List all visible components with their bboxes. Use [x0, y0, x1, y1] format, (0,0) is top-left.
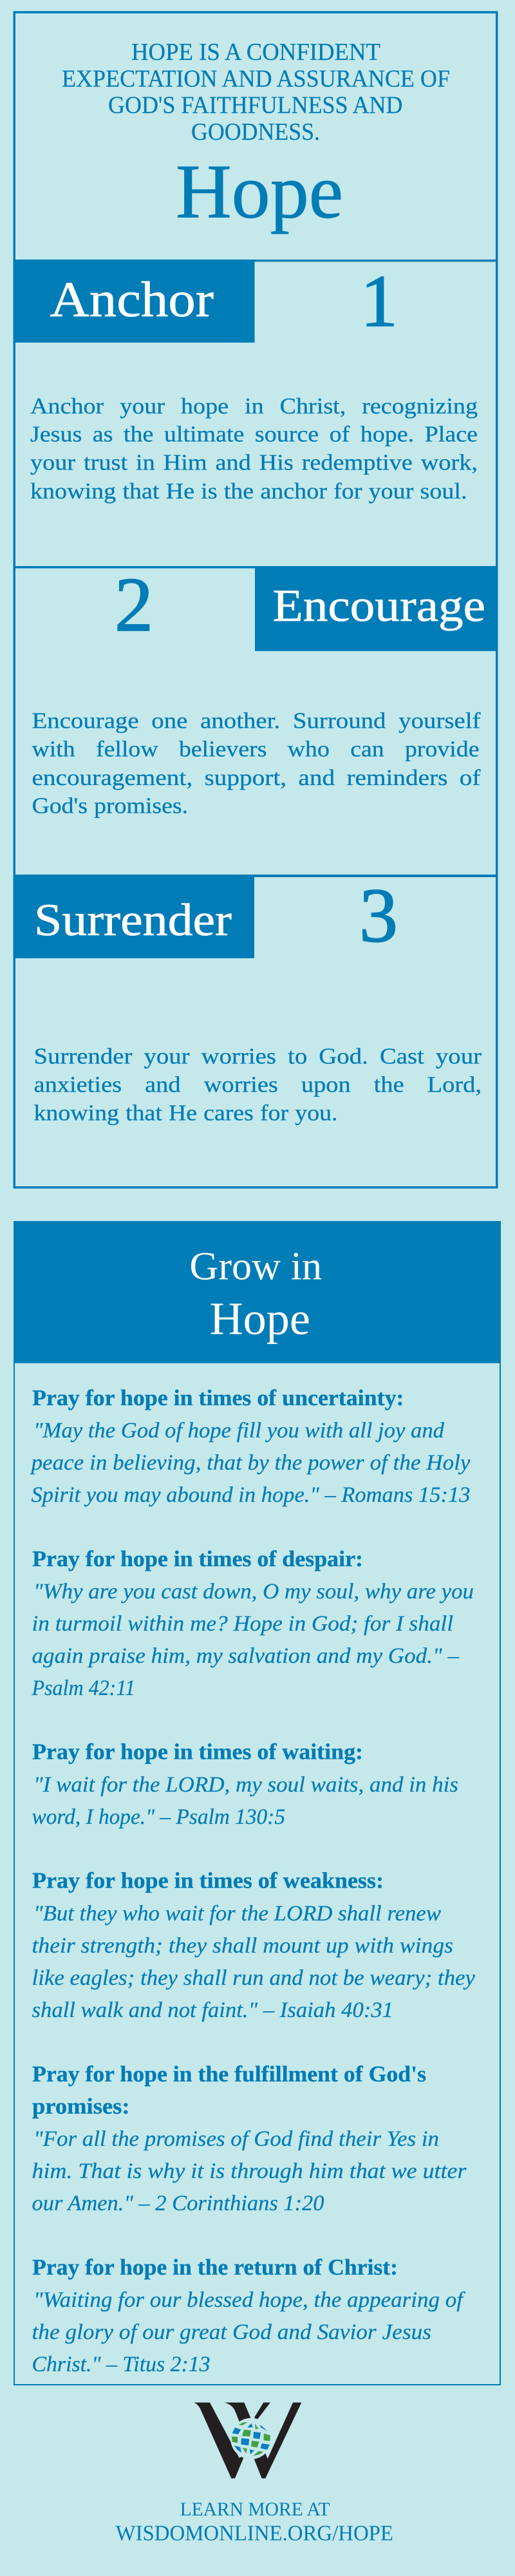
prayer: waiting: [32, 1739, 458, 1829]
prayer: uncertainty: peace in believing, that by the power of the Holy: [30, 1451, 471, 1475]
step 1 text: Jesus as the ultimate source of hope. Place: [30, 421, 478, 446]
step 2 text: with fellow believers who can provide: [32, 737, 479, 762]
intro text: GOD'S FAITHFULNESS AND: [108, 92, 403, 119]
grow header: Grow in: [189, 1245, 322, 1289]
step 1 text: your trust in Him and His redemptive work,: [30, 450, 478, 475]
prayer: weakness: like eagles; they shall run and not be weary; they: [32, 1966, 476, 1990]
prayer: return of Christ: Christ." – Titus 2:13: [32, 2353, 210, 2376]
step 2 number: 2: [115, 562, 153, 647]
intro text: HOPE IS A CONFIDENT: [131, 39, 380, 66]
prayer: promises: Pray for hope in the fulfillment of God's: [32, 2061, 426, 2087]
prayer: uncertainty: [30, 1385, 471, 1507]
prayer: waiting: Pray for hope in times of waiting:: [32, 1739, 363, 1765]
prayer: despair: again praise him, my salvation and my God." –: [32, 1644, 460, 1668]
prayer: promises: "For all the promises of God find their Yes in: [33, 2127, 439, 2151]
step 3 text: anxieties and worries upon the Lord,: [33, 1072, 482, 1097]
step 3 number: 3: [359, 873, 398, 958]
step 2 text: encouragement, support, and reminders of: [32, 765, 481, 790]
prayer: return of Christ: the glory of our great God and Savior Jesus: [32, 2320, 431, 2344]
intro text: EXPECTATION AND ASSURANCE OF: [62, 65, 450, 92]
step 1 heading: [14, 260, 255, 343]
prayer: despair: Pray for hope in times of despair:: [32, 1546, 363, 1571]
prayer: waiting: word, I hope." – Psalm 130:5: [32, 1805, 285, 1829]
step 3 text: Surrender your worries to God. Cast your: [33, 1044, 482, 1069]
prayer: return of Christ: Pray for hope in the return of Christ:: [32, 2255, 398, 2280]
step 1 heading: Anchor: [50, 271, 214, 327]
icon: Wisdom Online W logo with globe: [194, 2403, 301, 2478]
prayer: despair: [32, 1546, 474, 1700]
prayer: waiting: "I wait for the LORD, my soul waits, and in his: [33, 1773, 458, 1797]
step 2 text: [32, 708, 481, 819]
prayer: uncertainty: "May the God of hope fill you with all joy and: [33, 1419, 445, 1443]
step 1 number: 1: [360, 260, 398, 342]
prayer: despair: in turmoil within me? Hope in God; for I shall: [32, 1612, 453, 1636]
step 2 text: Encourage one another. Surround yourself: [32, 708, 481, 734]
prayer: despair: "Why are you cast down, O my soul, why are you: [33, 1580, 474, 1604]
prayer: promises: promises:: [32, 2094, 130, 2119]
prayer: despair: Psalm 42:11: [32, 1676, 135, 1700]
footer text: LEARN MORE AT: [180, 2499, 330, 2520]
step 3 text: knowing that He cares for you.: [33, 1101, 337, 1126]
step 1 text: [30, 393, 478, 504]
prayer: return of Christ: "Waiting for our blessed hope, the appearing of: [33, 2288, 466, 2312]
grow header: [14, 1221, 501, 1363]
prayer: weakness: shall walk and not faint." – Isaiah 40:31: [32, 1998, 393, 2022]
grow header: Hope: [210, 1293, 310, 1345]
panel: grow in hope: [14, 1221, 501, 2385]
step 3 heading: [13, 875, 254, 958]
prayer: promises: him. That is why it is through him that we utter: [32, 2159, 467, 2183]
intro text: GOODNESS.: [191, 118, 320, 146]
footer text: WISDOMONLINE.ORG/HOPE: [116, 2522, 393, 2545]
prayer: weakness: "But they who wait for the LORD shall renew: [33, 1902, 441, 1926]
step 2 text: God's promises.: [32, 793, 188, 819]
prayer: weakness: Pray for hope in times of weakness:: [32, 1868, 384, 1893]
step 1 text: knowing that He is the anchor for your soul.: [30, 478, 467, 504]
intro text: [62, 39, 450, 146]
footer text: [116, 2499, 393, 2545]
step 2 heading: Encourage: [273, 581, 485, 631]
step 1 text: Anchor your hope in Christ, recognizing: [30, 393, 478, 419]
panel: hope steps: [13, 12, 498, 1188]
title: Hope: [176, 148, 343, 234]
prayer: weakness: their strength; they shall mount up with wings: [32, 1934, 453, 1958]
prayer: uncertainty: Spirit you may abound in hope." – Romans 15:13: [31, 1483, 470, 1507]
prayer: return of Christ: [32, 2255, 466, 2376]
step 3 heading: Surrender: [34, 895, 232, 945]
prayer: promises: our Amen." – 2 Corinthians 1:20: [32, 2192, 324, 2215]
prayer: promises: [32, 2061, 467, 2215]
prayer: weakness: [32, 1868, 476, 2022]
step 3 text: [33, 1044, 482, 1126]
prayer: uncertainty: Pray for hope in times of uncertainty:: [32, 1385, 404, 1410]
step 2 heading: [255, 567, 498, 651]
